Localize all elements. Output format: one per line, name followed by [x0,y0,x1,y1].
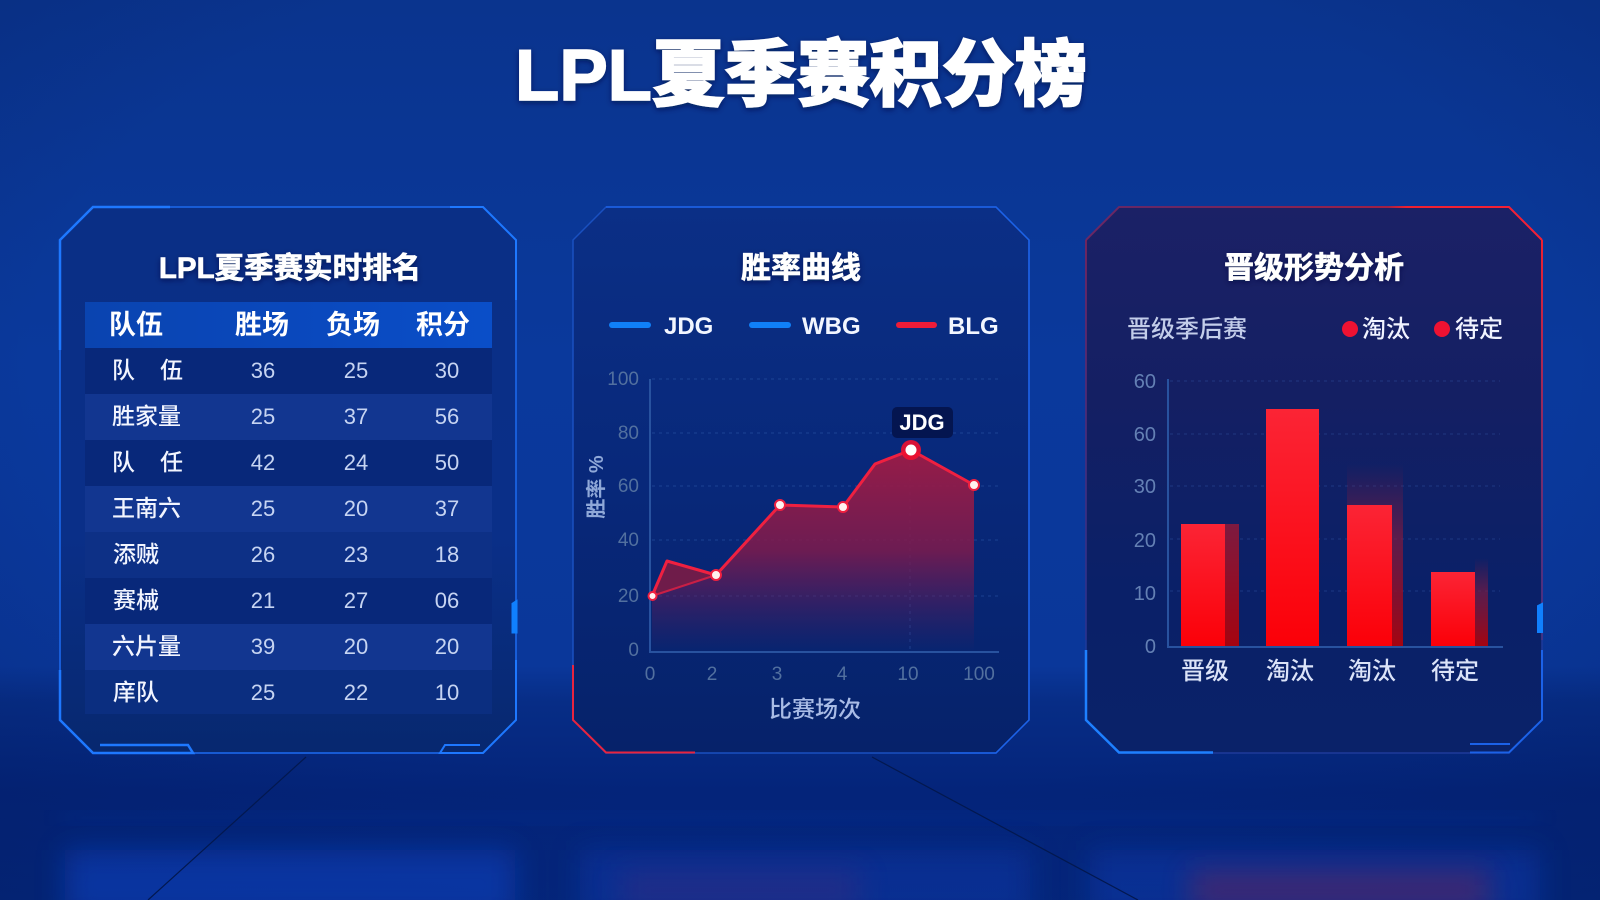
table header: 队伍 [109,310,163,340]
y axis labels: 80 [618,423,639,444]
area fill [652,450,974,652]
table numbers: 18 [435,542,459,567]
y axis labels [1134,371,1156,658]
y axis labels: 20 [1134,530,1156,552]
x axis labels [645,664,995,685]
x axis labels: 淘汰 [1348,658,1396,685]
y axis labels: 40 [618,530,639,551]
table numbers: 20 [344,496,368,521]
table numbers: 37 [344,404,368,429]
table numbers: 20 [344,634,368,659]
bars [1181,524,1225,646]
legend [609,313,999,340]
x axis title: 比赛场次 [769,696,861,722]
panel: live ranking table [60,207,516,753]
team names [112,357,183,705]
x axis labels: 淘汰 [1266,658,1314,685]
table numbers: 37 [435,496,459,521]
table header: 积分 [416,310,470,340]
panel: playoff outlook [1086,207,1542,753]
data points [648,480,979,600]
y axis labels: 100 [607,369,639,390]
table header: 胜场 [235,310,289,340]
y axis labels: 60 [1134,371,1156,393]
y axis labels: 0 [628,640,639,661]
table numbers: 21 [251,588,275,613]
x axis labels: 4 [837,664,848,685]
table numbers: 56 [435,404,459,429]
subtitle: 晋级季后赛 [1127,316,1247,343]
table numbers: 27 [344,588,368,613]
table numbers: 23 [344,542,368,567]
team names: 庠队 [113,679,159,705]
y axis labels: 60 [618,476,639,497]
table numbers: 10 [435,680,459,705]
table numbers: 42 [251,450,275,475]
x axis labels: 100 [963,664,995,685]
x axis labels [1181,658,1479,685]
title: LPL夏季赛积分榜 [515,35,1087,116]
team names: 队 [112,449,135,475]
team names: 添贼 [113,541,159,567]
table numbers: 25 [251,680,275,705]
table numbers: 36 [251,358,275,383]
BLG line [652,450,974,596]
x axis labels: 晋级 [1181,658,1229,685]
table numbers: 30 [435,358,459,383]
y axis labels: 20 [618,586,639,607]
table numbers [251,358,459,705]
x axis labels: 待定 [1431,658,1479,685]
table numbers: 25 [251,404,275,429]
panel heading: 胜率曲线 [741,252,861,285]
legend: WBG [802,313,861,340]
legend: 待定 [1455,316,1503,343]
table numbers: 39 [251,634,275,659]
team names: 任 [160,449,183,475]
team names: 赛械 [113,587,159,613]
legend [1342,316,1503,343]
panel heading: LPL夏季赛实时排名 [159,252,421,285]
x axis labels: 3 [772,664,782,685]
table numbers: 25 [344,358,368,383]
bar shadows [1225,524,1239,646]
x axis labels: 10 [897,664,919,685]
ranking table [85,302,492,714]
table header [109,310,470,340]
table header: 负场 [326,310,380,340]
y axis labels: 30 [1134,476,1156,498]
legend: JDG [664,313,713,340]
tooltip: JDG [899,410,945,435]
table numbers: 25 [251,496,275,521]
team names: 伍 [160,357,183,383]
x axis labels: 2 [707,664,717,685]
y axis labels: 10 [1134,583,1156,605]
y axis labels [607,369,639,661]
panel: win rate curve [573,207,1029,753]
team names: 六片量 [112,633,181,659]
y axis labels: 0 [1145,636,1156,658]
y axis title: 胜率 % [585,455,608,519]
table numbers: 24 [344,450,368,475]
table numbers: 22 [344,680,368,705]
panel heading: 晋级形势分析 [1224,252,1404,285]
table numbers: 50 [435,450,459,475]
table numbers: 06 [435,588,459,613]
team names: 胜家量 [112,403,181,429]
tooltip [892,407,953,438]
table numbers: 26 [251,542,275,567]
legend: 淘汰 [1362,316,1410,343]
bar chart [1134,371,1503,685]
table numbers: 20 [435,634,459,659]
y axis labels: 60 [1134,424,1156,446]
line chart [585,369,1002,722]
x axis labels: 0 [645,664,655,685]
legend: BLG [948,313,999,340]
team names: 队 [112,357,135,383]
team names: 王南六 [112,495,181,521]
